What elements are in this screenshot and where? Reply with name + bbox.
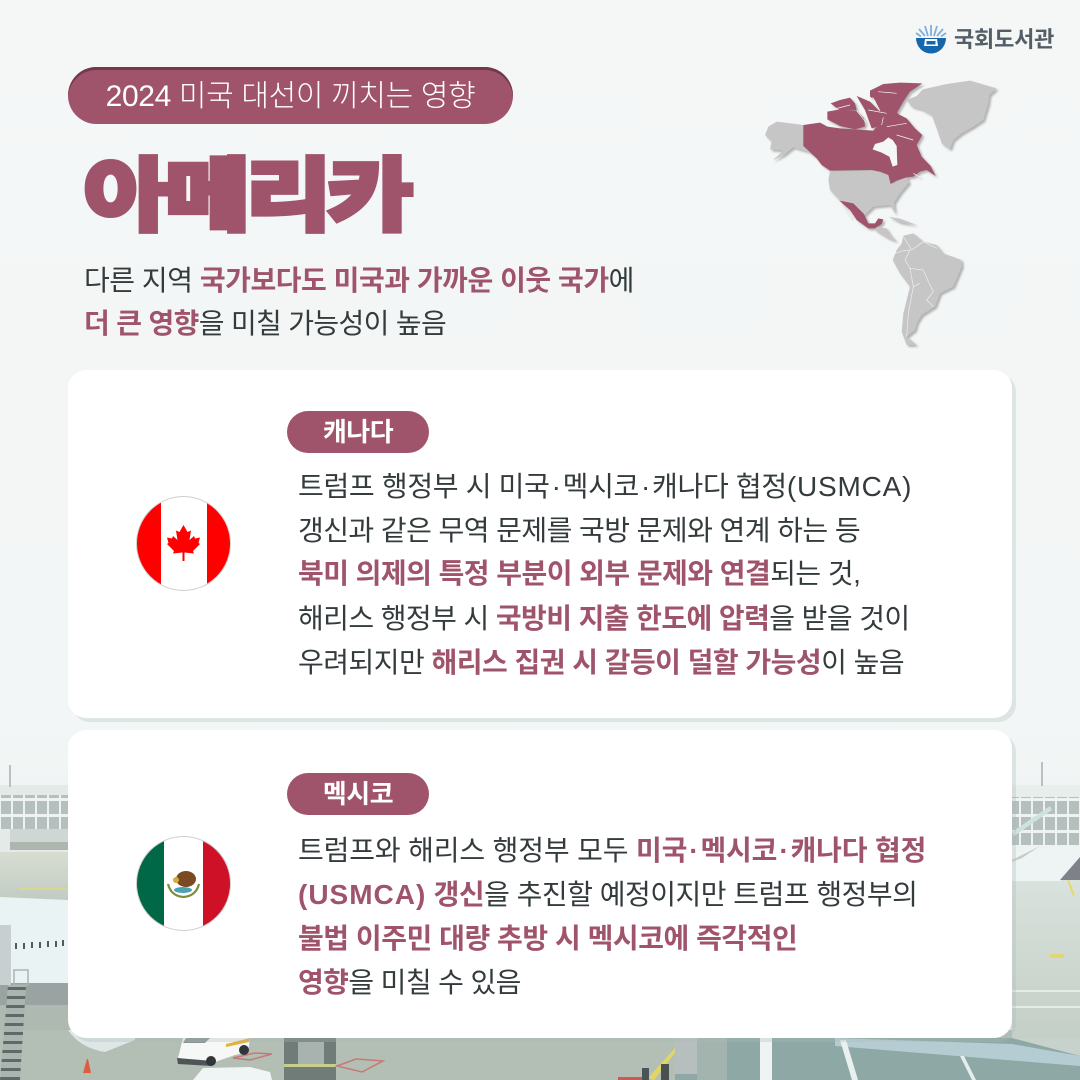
title: 아메리카 [84,153,409,241]
tag: Canada [287,411,429,453]
left terminal [0,785,80,855]
logo text: 국회도서관 [954,27,1054,52]
South America [893,233,962,345]
Alaska [765,122,819,161]
text: Mexico body: 불법 이주민 대량 추방 시 멕시코에 즉각적인 [298,923,797,954]
Canada and Mexico highlight [803,83,936,228]
text: Mexico body: 영향을 미칠 수 있음 [298,967,521,998]
tag: Mexico [287,773,429,815]
text: Canada body: 갱신과 같은 무역 문제를 국방 문제와 연계 하는 등 [298,515,860,546]
Greenland [907,81,997,149]
panel: Canada [68,370,1012,718]
USA [828,171,909,216]
heading pill [68,67,513,124]
icon: Canada flag [136,496,231,591]
text: Mexico body [298,835,926,998]
tag: Mexico: 멕시코 [323,779,393,809]
text: Canada body: 트럼프 행정부 시 미국·멕시코·캐나다 협정(USMCA) [298,471,912,502]
icon: Mexico flag [136,836,231,931]
Central America and Caribbean [875,217,917,242]
text: Canada body: 해리스 행정부 시 국방비 지출 한도에 압력을 받을 것이 [298,603,910,634]
apron strip [0,1030,1012,1080]
intro text: 다른 지역 국가보다도 미국과 가까운 이웃 국가에 [84,265,634,296]
panel: Mexico [68,730,1012,1038]
text: Canada body: 우려되지만 해리스 집권 시 갈등이 덜할 가능성이 높음 [298,647,904,678]
vans [178,1038,250,1062]
icon: library emblem [916,25,946,54]
right apron and jet bridge [648,1048,675,1080]
map: the Americas [765,80,999,348]
text: Canada body: 북미 의제의 특정 부분이 외부 문제와 연결되는 것, [298,558,860,589]
logo: National Assembly Library [916,25,1054,54]
left aircraft [0,897,68,983]
ground vehicle [284,1038,336,1080]
text: Mexico body: 트럼프와 해리스 행정부 모두 미국·멕시코·캐나다 협정 [298,835,926,866]
intro text [84,265,634,339]
text: Canada body [298,471,912,678]
intro text: 더 큰 영향을 미칠 가능성이 높음 [84,308,446,339]
right terminal [1000,785,1080,845]
tag: Canada: 캐나다 [323,417,393,447]
heading pill: 2024 미국 대선이 끼치는 영향 [106,80,475,113]
text: Mexico body: (USMCA) 갱신을 추진할 예정이지만 트럼프 행정부의 [298,879,917,910]
